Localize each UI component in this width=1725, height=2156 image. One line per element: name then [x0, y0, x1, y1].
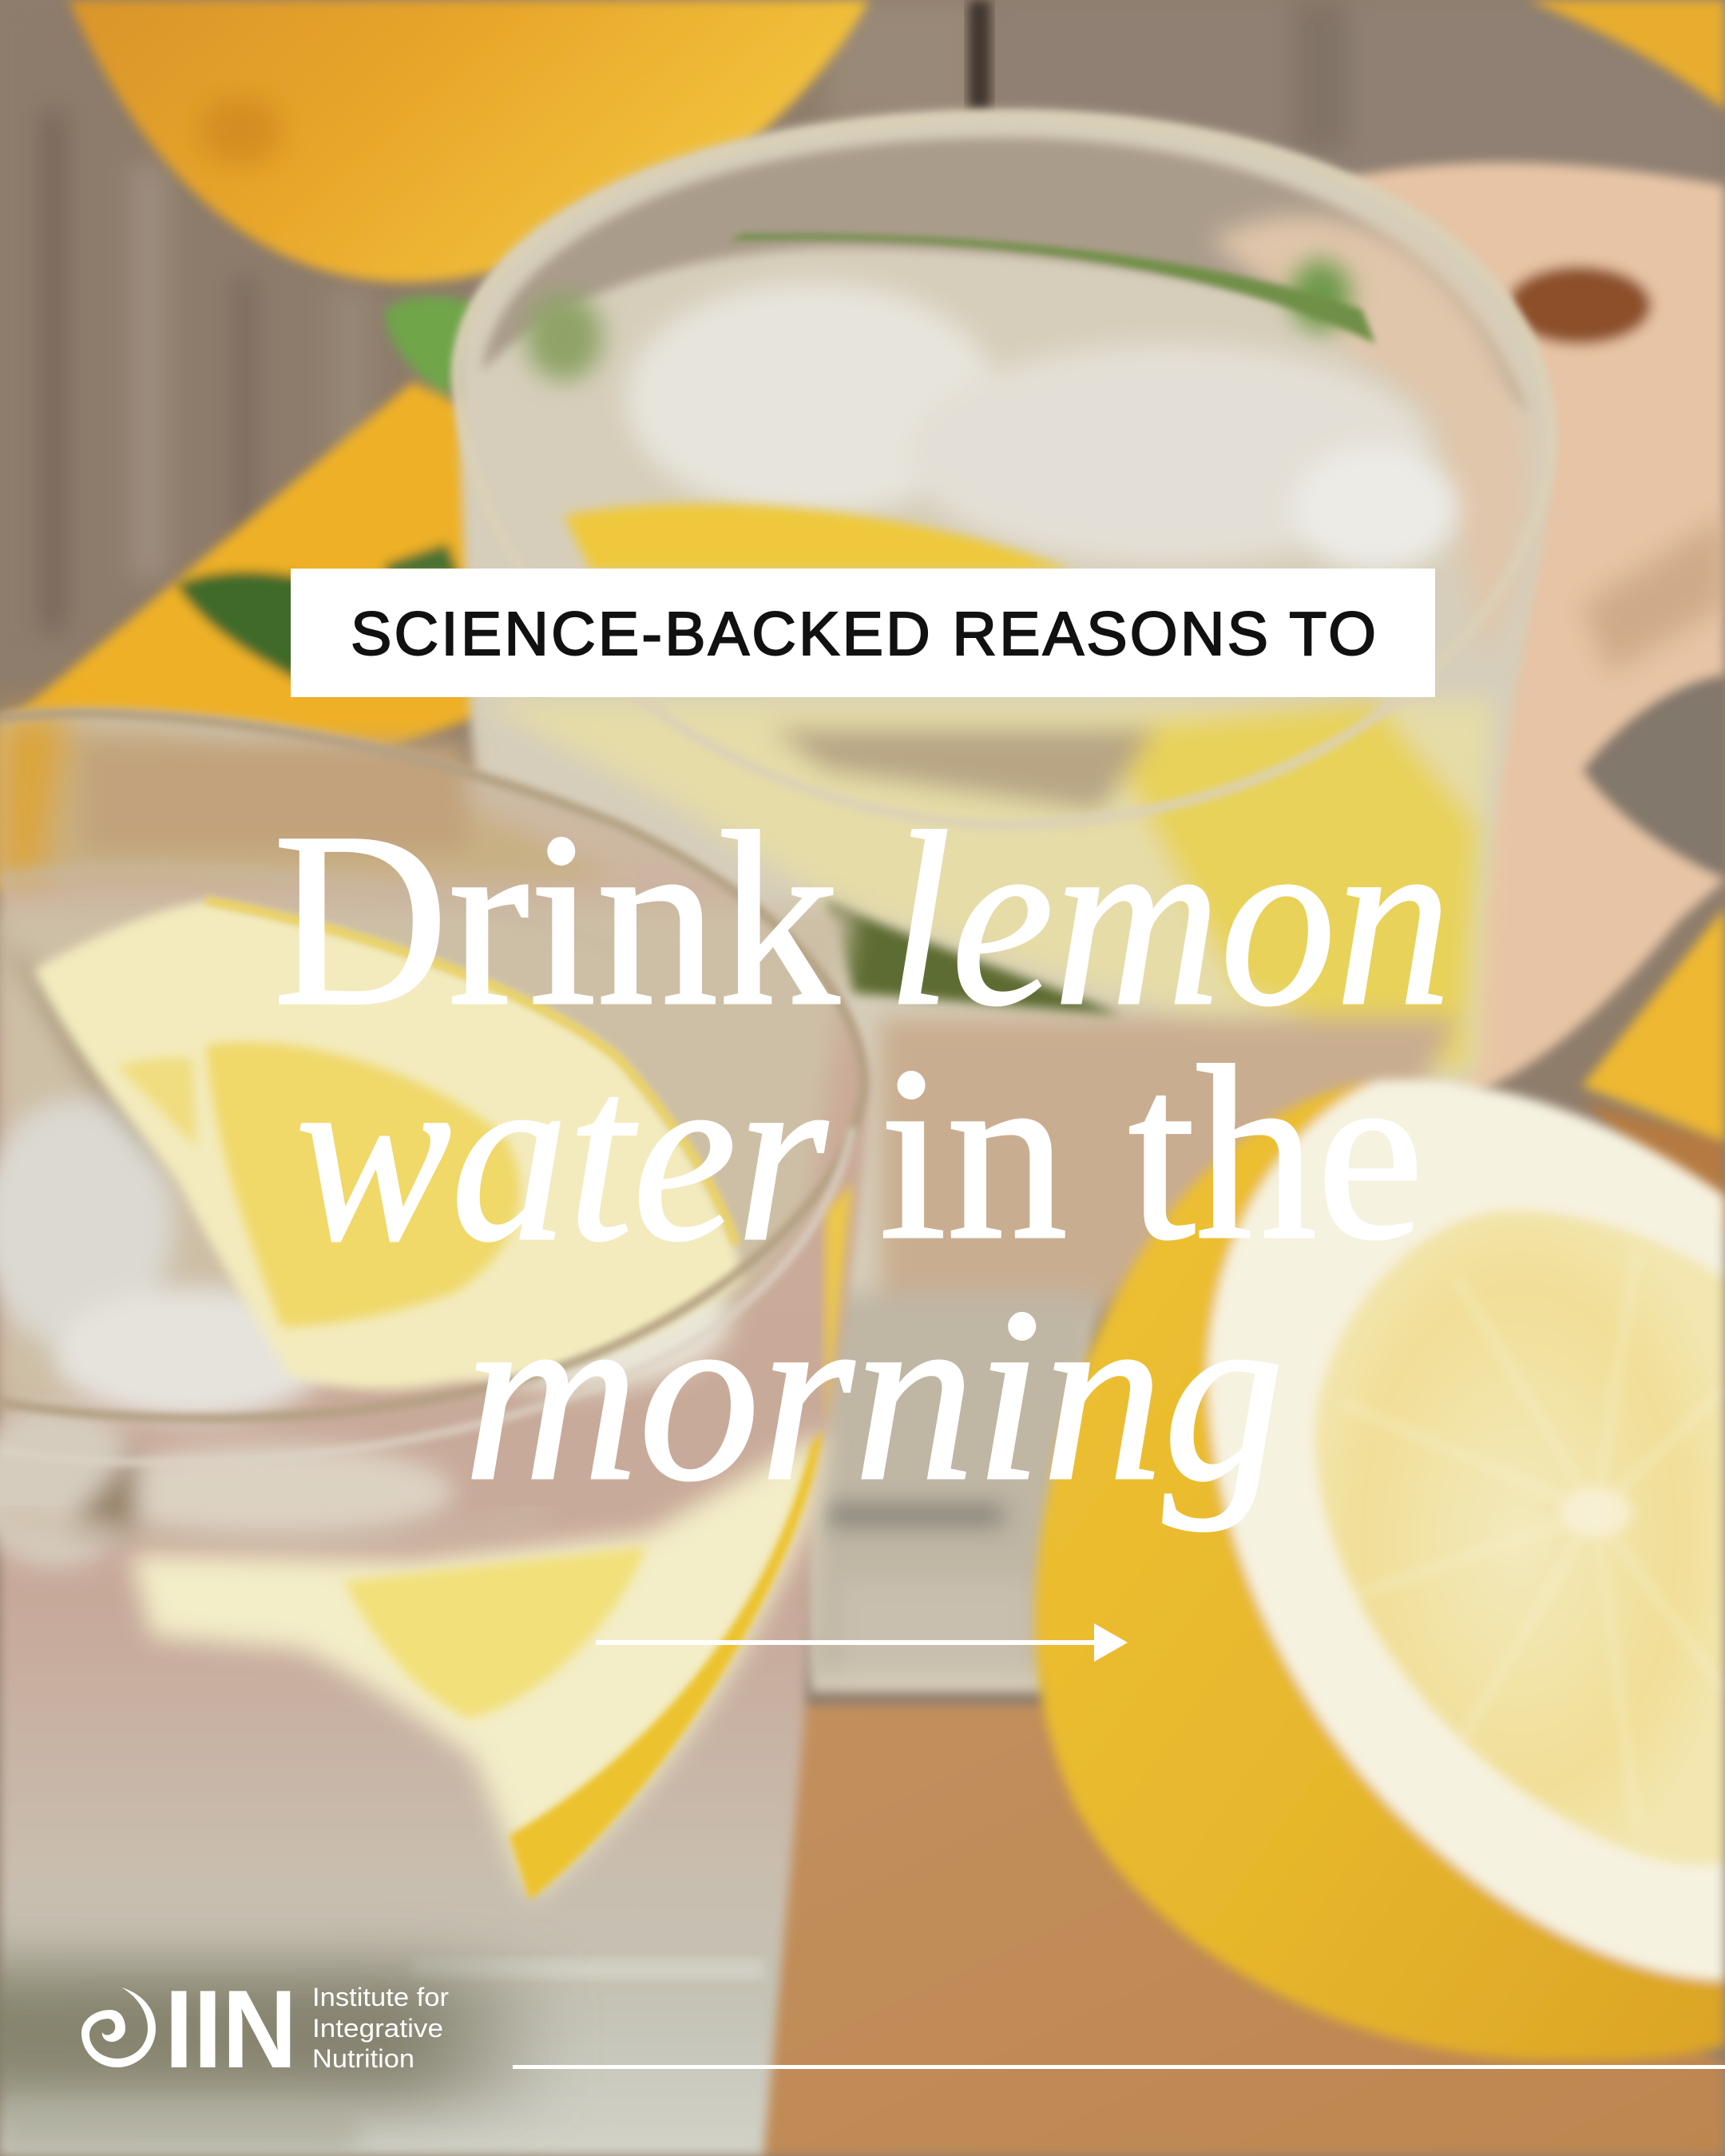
title: Drink lemon water in the morning — [273, 782, 1451, 1532]
label: science-backed reasons to: SCIENCE-BACKED REASONS TO — [351, 600, 1376, 668]
wordmark: Institute for Integrative Nutrition — [312, 1983, 449, 2073]
bottom rule — [513, 2065, 1725, 2069]
front slice of lemon bottom — [131, 1430, 825, 1897]
title: Drink lemon water in the morning: morning — [464, 1257, 1284, 1532]
wooden table surface — [756, 1705, 1725, 2156]
back glass with ice and lemon — [457, 110, 1554, 1691]
halved lemon, right — [1035, 1080, 1725, 2061]
lemon: top blurred fruit — [69, 0, 870, 282]
cutting board — [1211, 163, 1725, 1238]
lemon wedge and leaves, left — [0, 261, 647, 894]
icon: swirl — [81, 1988, 156, 2067]
title: Drink lemon water in the morning: water — [295, 1017, 831, 1293]
wordmark: Institute for Integrative Nutrition: Integrative — [312, 2014, 443, 2043]
title: Drink lemon water in the morning: lemon — [887, 782, 1451, 1057]
front slice of lemon top — [34, 901, 743, 1389]
glass rim — [0, 714, 864, 1419]
front glass with ice and lemon slices — [0, 709, 870, 2156]
title: Drink lemon water in the morning: in the — [879, 1016, 1424, 1291]
arrow — [596, 1623, 1128, 1662]
logo: IIN swirl and wordmark — [81, 1968, 449, 2091]
title: Drink lemon water in the morning: Drink — [273, 782, 839, 1057]
wordmark: Institute for Integrative Nutrition: Nutrition — [312, 2044, 414, 2073]
wood seen through glass rim — [482, 137, 1527, 413]
label: science-backed reasons to — [291, 569, 1435, 697]
wordmark: Institute for Integrative Nutrition: Institute for — [312, 1983, 449, 2011]
wordmark: IIN letters: IIN — [165, 1968, 297, 2091]
